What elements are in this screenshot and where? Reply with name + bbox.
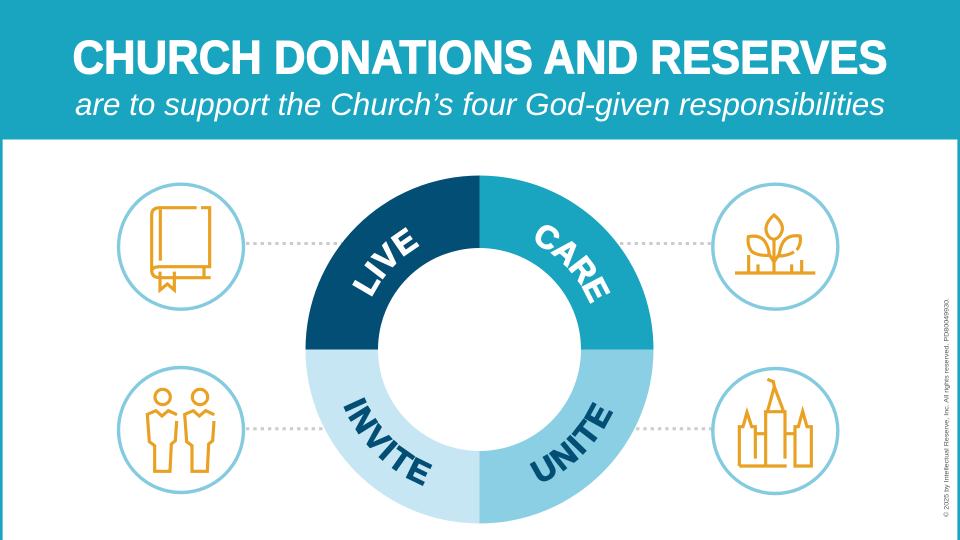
label: live: LIVE — [352, 227, 420, 296]
icon circle: book — [118, 184, 244, 309]
label: unite: UNITE — [530, 402, 614, 482]
icon: plant — [735, 215, 815, 273]
connector: plant to ring — [620, 242, 712, 245]
icon: temple — [739, 379, 811, 466]
icon circle: plant — [713, 184, 838, 309]
connector: book to ring — [246, 242, 342, 245]
icon: book — [152, 208, 211, 290]
donut ring chart — [306, 176, 654, 524]
segment: invite — [306, 350, 480, 524]
segment: care — [480, 176, 654, 350]
icon circle: people — [118, 368, 244, 492]
subtitle: are to support the Church’s four God-given responsibilities — [75, 86, 885, 122]
icon: two people — [147, 389, 214, 471]
frame: side borders — [0, 139, 960, 540]
header band — [0, 0, 960, 140]
title: CHURCH DONATIONS AND RESERVES — [72, 30, 888, 83]
connector: people to ring — [246, 427, 325, 430]
label: invite: INVITE — [344, 397, 432, 486]
connector: temple to ring — [636, 427, 712, 430]
copyright notice: © 2025 by Intellectual Reserve, Inc. All rights reserved. PD80049930. — [942, 298, 950, 517]
segment: unite — [480, 350, 654, 524]
segment: live — [306, 176, 480, 350]
icon circle: temple — [713, 368, 838, 494]
label: care: CARE — [535, 225, 610, 304]
